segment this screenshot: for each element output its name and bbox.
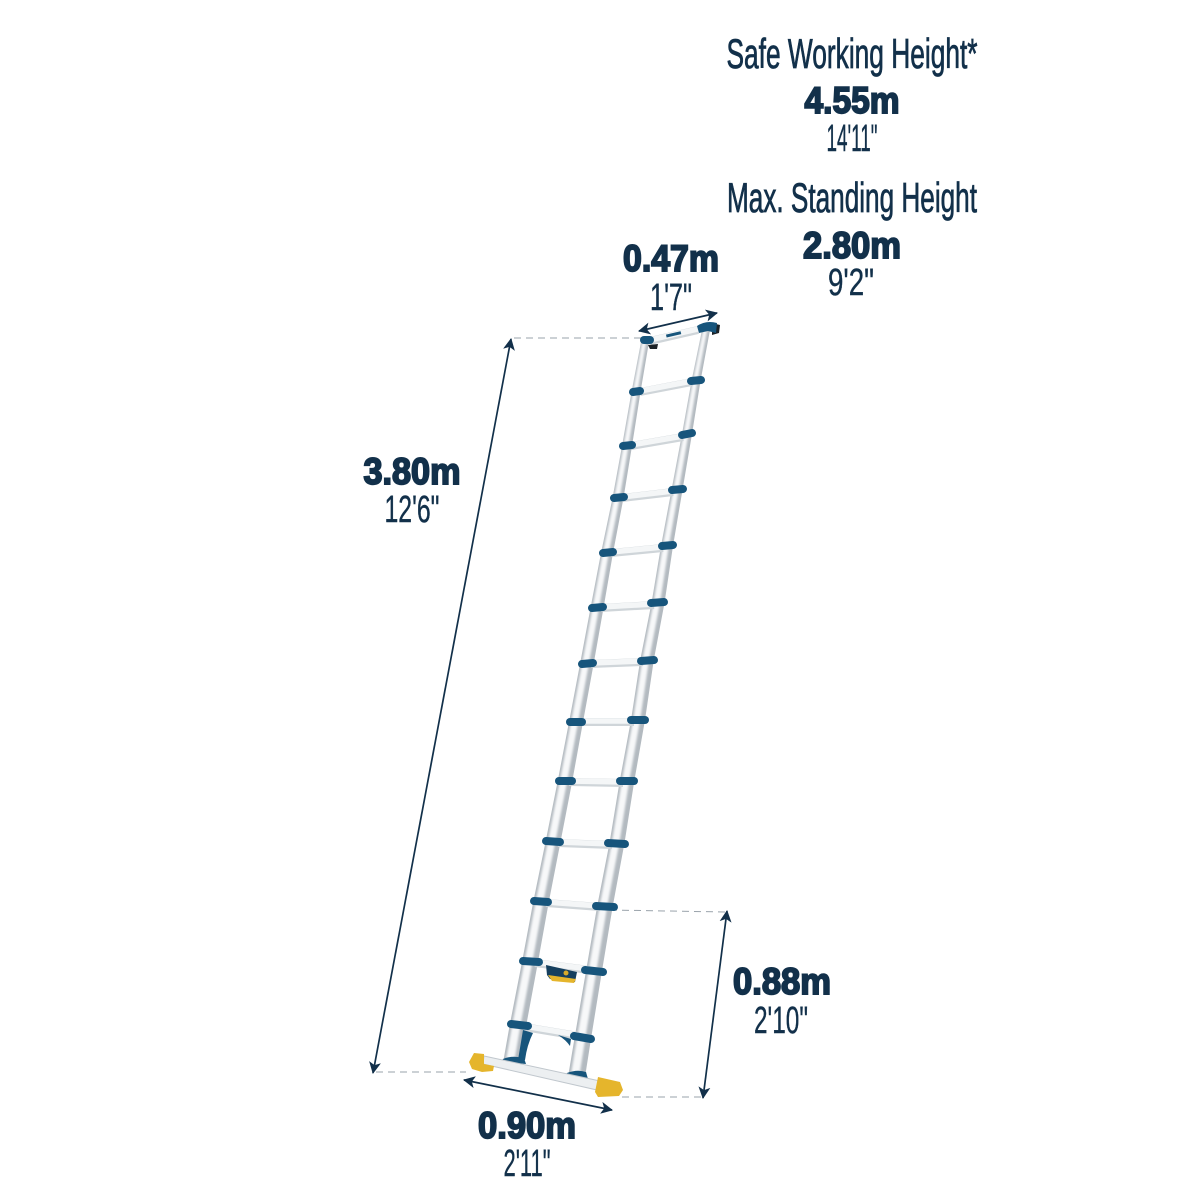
rail collars — [511, 340, 701, 1039]
dimension label: base width: 0.90m — [478, 1105, 576, 1146]
base stabiliser bar — [483, 1030, 600, 1090]
dimension lines and arrows — [373, 313, 727, 1110]
dimension label: closed height — [364, 451, 460, 531]
dimension label: base width: 2'11" — [504, 1143, 550, 1185]
dimension label: top width — [623, 238, 719, 319]
yellow foot: left — [469, 1053, 494, 1072]
dimension label: closed height: 12'6" — [384, 489, 440, 531]
spec: max standing height: Max. Standing Height — [727, 174, 977, 221]
stabiliser latch — [546, 965, 577, 983]
yellow foot: right — [595, 1077, 623, 1097]
ladder — [469, 322, 720, 1097]
dimension label: top width: 1'7" — [650, 277, 692, 319]
spec: max standing height: 2.80m — [803, 225, 901, 266]
dimension label: base width — [478, 1105, 576, 1185]
spec: safe working height — [726, 30, 978, 160]
dimension label: rung section height: 2'10" — [754, 1000, 808, 1042]
rungs — [524, 329, 698, 1036]
left rail — [504, 342, 649, 1060]
spec: safe working height: 4.55m — [804, 80, 900, 121]
dimension label: closed height: 3.80m — [364, 451, 460, 492]
spec: safe working height: Safe Working Height* — [726, 30, 978, 77]
spec: max standing height — [727, 174, 977, 304]
dimension label: top width: 0.47m — [623, 238, 719, 279]
spec: max standing height: 9'2" — [828, 262, 874, 304]
dimension label: rung section height — [733, 961, 831, 1042]
right rail — [568, 330, 710, 1074]
top cap and logo plate — [648, 322, 720, 349]
spec: safe working height: 14'11" — [826, 118, 878, 160]
dimension label: rung section height: 0.88m — [733, 961, 831, 1002]
